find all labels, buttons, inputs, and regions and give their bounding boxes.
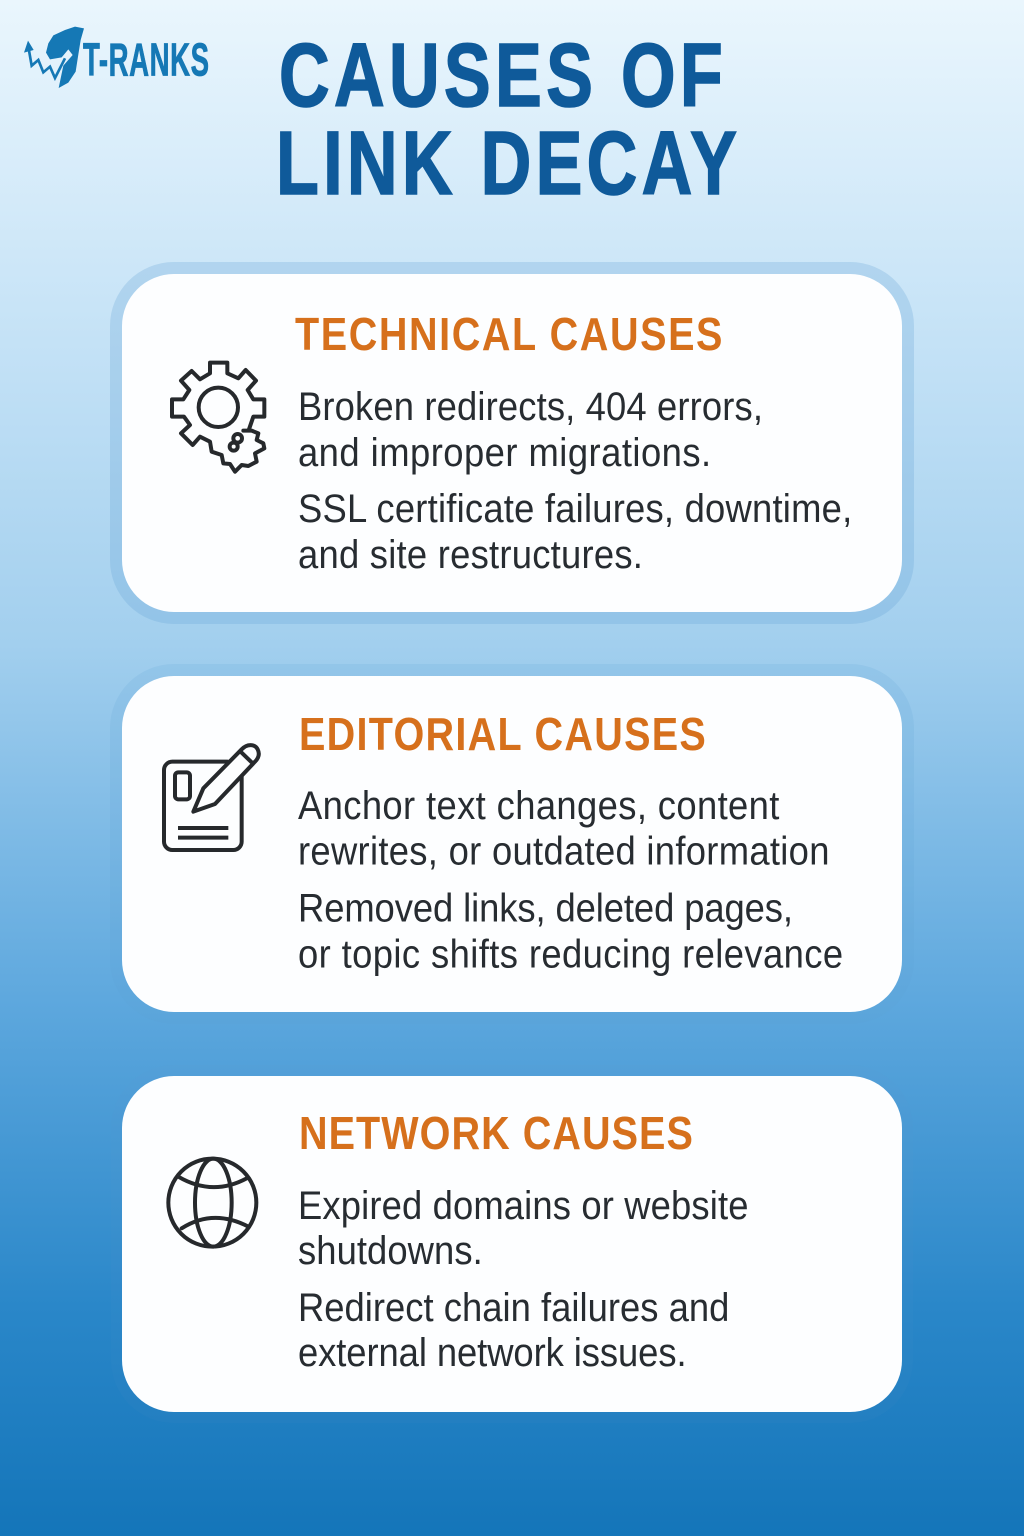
title: LINK DECAY	[276, 114, 737, 214]
text: technical causes body	[298, 384, 852, 577]
panel: editorial causes	[110, 664, 914, 1024]
title	[276, 26, 737, 214]
text: network causes body: Redirect chain failures and	[298, 1285, 729, 1330]
text: network causes body: Expired domains or website	[298, 1183, 748, 1228]
text: editorial causes body: Removed links, deleted pages,	[298, 886, 793, 931]
text: technical causes body: Broken redirects, 404 errors,	[298, 384, 763, 429]
text: editorial causes body	[298, 783, 843, 977]
heading: network causes: NETWORK CAUSES	[299, 1108, 693, 1160]
icon: document and pencil	[164, 745, 259, 850]
title: CAUSES OF	[279, 26, 723, 126]
text: editorial causes body: rewrites, or outdated information	[298, 829, 829, 874]
text: technical causes body: and improper migrations.	[298, 430, 711, 475]
panel: technical causes	[110, 262, 914, 624]
heading: editorial causes: EDITORIAL CAUSES	[299, 709, 706, 761]
panel: network causes	[111, 1065, 913, 1423]
text: editorial causes body: Anchor text changes, content	[298, 783, 780, 828]
text: network causes body: shutdowns.	[298, 1228, 483, 1273]
icon: globe	[168, 1159, 256, 1247]
logo wordmark: T-RANKS	[83, 35, 209, 86]
icon: dinosaur with rising arrow	[24, 27, 84, 88]
text: technical causes body: SSL certificate failures, downtime,	[298, 486, 852, 531]
text: technical causes body: and site restructures.	[298, 532, 643, 577]
text: network causes body: external network issues.	[298, 1330, 687, 1375]
text: network causes body	[298, 1183, 748, 1375]
text: editorial causes body: or topic shifts reducing relevance	[298, 932, 843, 977]
logo: T-Ranks	[24, 27, 209, 88]
icon: gears	[172, 363, 264, 472]
heading: technical causes: TECHNICAL CAUSES	[295, 309, 722, 361]
